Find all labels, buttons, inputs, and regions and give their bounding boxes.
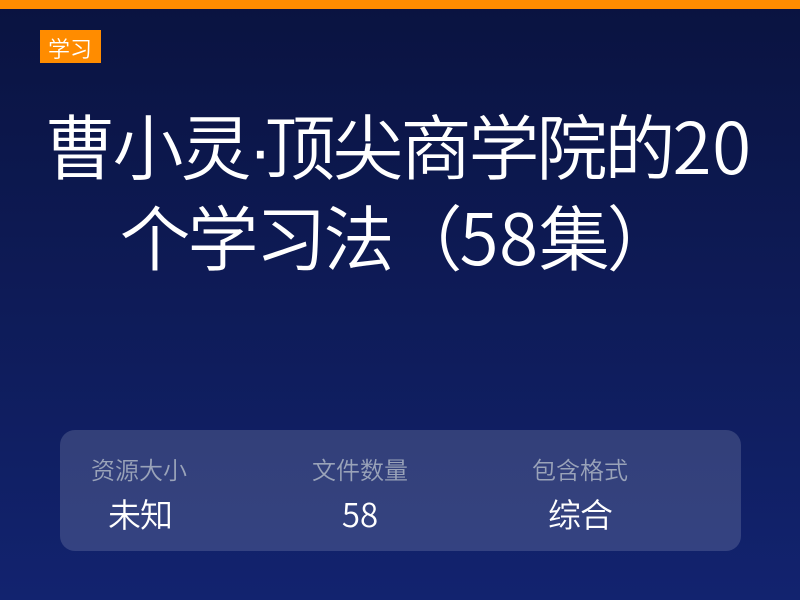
- value: file count: 58: [342, 489, 378, 537]
- category tag: 学习: [48, 32, 92, 64]
- title: 个学习法（58集）: [120, 184, 675, 286]
- value: resource size: 未知: [108, 489, 172, 537]
- title: [44, 93, 752, 286]
- category tag: [40, 30, 101, 63]
- title: 曹小灵顶尖商学院的20: [44, 93, 752, 195]
- value: formats: 综合: [548, 489, 612, 537]
- label: file count: 文件数量: [312, 451, 408, 486]
- label: resource size: 资源大小: [91, 451, 187, 486]
- panel: resource info: [60, 430, 741, 551]
- top accent bar: [0, 0, 800, 9]
- label: formats: 包含格式: [532, 451, 628, 486]
- title: ·: [249, 111, 272, 190]
